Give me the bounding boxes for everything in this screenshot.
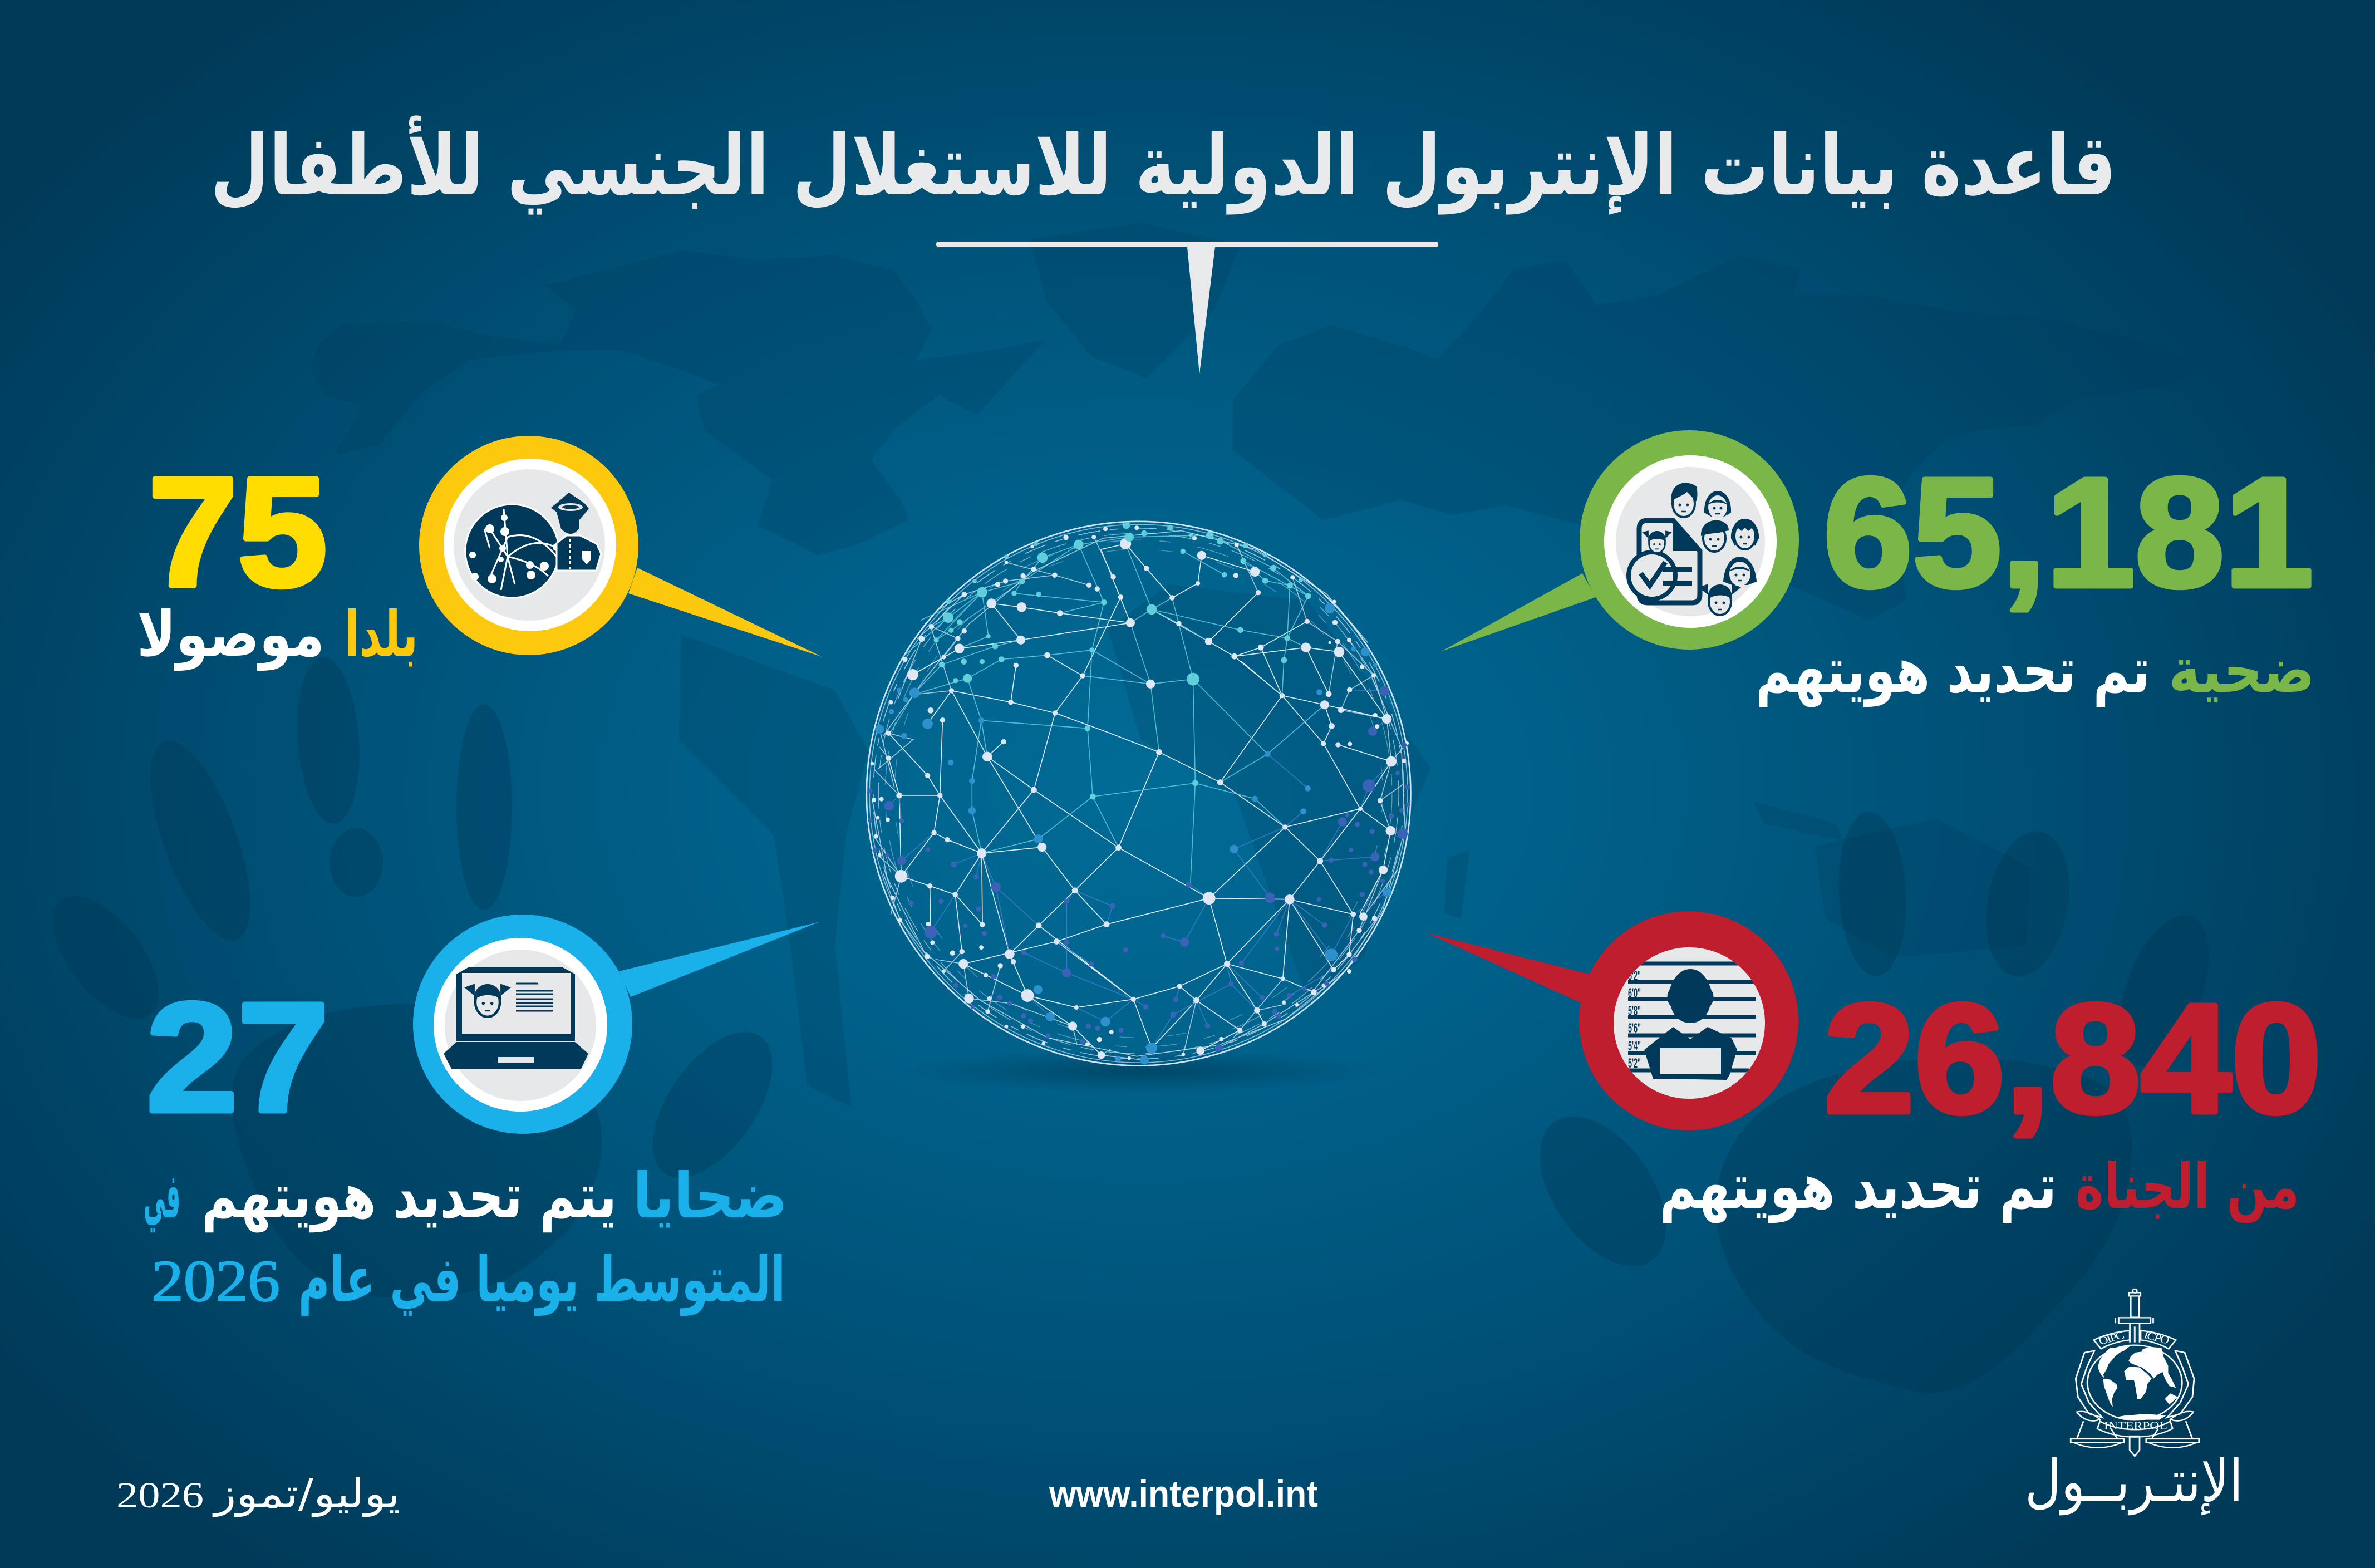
icon: network globe and officer — [465, 493, 601, 598]
caption white words: تم تحديد هويتهم — [1756, 635, 2150, 707]
icon: offender at height chart: 5'2" — [1628, 1056, 1641, 1071]
caption white word: موصولا — [137, 598, 324, 671]
stat: 27 victims per day (blue): في — [144, 1160, 180, 1233]
background handprint left — [33, 655, 796, 1298]
background handprint right — [1515, 810, 2226, 1393]
caption yellow word: بلدا — [345, 598, 418, 671]
icon: laptop with child profile — [444, 967, 588, 1069]
icon: victim files and faces — [1629, 483, 1759, 615]
icon: offender at height chart: 5'6" — [1628, 1021, 1641, 1036]
caption line one: white words: يتم تحديد هويتهم — [201, 1160, 617, 1233]
stat: 75 countries (yellow) — [137, 436, 822, 671]
stat: 65,181 victims (green) — [1442, 430, 2315, 707]
title pointer — [936, 242, 1438, 374]
caption line two: المتوسط يوميا في عام — [298, 1243, 785, 1316]
INTERPOL logo emblem: OIPC — [2097, 1329, 2126, 1347]
callout ring red — [1427, 911, 1798, 1130]
number 65,181: 65,181 — [1823, 446, 2313, 620]
icon: offender at height chart — [1628, 964, 1756, 1080]
INTERPOL logo emblem — [2071, 1289, 2199, 1456]
icon: offender at height chart: 5'8" — [1628, 1004, 1641, 1019]
INTERPOL logo emblem: ICPO — [2142, 1329, 2171, 1346]
stat: 27 victims per day (blue) — [144, 915, 820, 1316]
caption red words: من الجناة — [2076, 1151, 2299, 1223]
number 75: 75 — [148, 445, 327, 619]
globe shadow — [902, 1050, 1380, 1093]
number 26,840: 26,840 — [1824, 972, 2322, 1146]
caption green word: ضحية — [2169, 635, 2315, 707]
date year: 2026 — [116, 1475, 204, 1516]
icon: offender at height chart: 5'4" — [1628, 1039, 1641, 1054]
callout ring blue — [413, 915, 820, 1134]
INTERPOL logo Arabic wordmark: الإنتـربــول — [2025, 1447, 2243, 1516]
stat: 26,840 offenders (red) — [1427, 911, 2322, 1223]
INTERPOL logo emblem: INTERPOL — [2104, 1419, 2167, 1432]
date Arabic: يوليو/تموز — [213, 1470, 400, 1517]
callout ring green — [1442, 430, 1799, 651]
website: www.interpol.int — [1049, 1473, 1318, 1515]
icon: offender at height chart: 5'2" — [1628, 969, 1641, 984]
globe network — [867, 522, 1410, 1065]
caption white words: تم تحديد هويتهم — [1660, 1151, 2057, 1223]
background world map — [311, 223, 2210, 1108]
caption line one: blue word: ضحايا — [633, 1160, 788, 1232]
number 27: 27 — [146, 971, 329, 1144]
caption year: 2026 — [151, 1248, 280, 1314]
callout ring yellow — [419, 436, 822, 657]
icon: offender at height chart: 6'0" — [1628, 986, 1641, 1001]
